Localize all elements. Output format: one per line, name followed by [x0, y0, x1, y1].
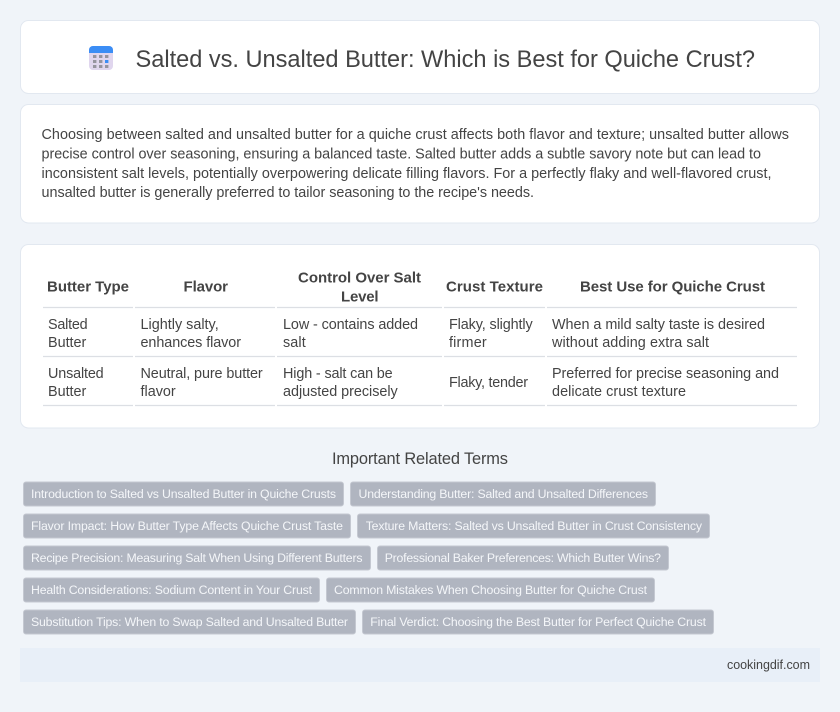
table row: salted butter: Butter — [48, 335, 87, 351]
tag — [358, 514, 710, 538]
paragraph text: inconsistent salt levels, potentially overpowering delicate filling flavors. For a perfectly flaky and well-flavored crust, — [42, 166, 772, 182]
table row: salted butter: without adding extra salt — [551, 335, 709, 351]
table header row: Crust Texture — [446, 278, 543, 296]
tag: Understanding Butter: Salted and Unsalted Differences — [358, 487, 648, 501]
tag — [24, 482, 344, 506]
table row: salted butter: When a mild salty taste is desired — [552, 317, 765, 333]
paragraph text — [42, 127, 789, 201]
tag: Health Considerations: Sodium Content in Your Crust — [31, 583, 313, 597]
tag group: related terms — [24, 482, 714, 634]
table header row: Level — [341, 288, 378, 306]
table row: salted butter: salt — [283, 335, 306, 351]
table row: salted butter: Flaky, slightly — [449, 317, 533, 333]
panel: comparison table — [20, 244, 820, 428]
table row: unsalted butter — [48, 366, 779, 400]
table row: salted butter: enhances flavor — [140, 335, 241, 351]
table row: salted butter: Salted — [48, 317, 88, 333]
table row: unsalted butter: delicate crust texture — [552, 384, 686, 400]
table header row — [47, 270, 765, 306]
tag: Texture Matters: Salted vs Unsalted Butter in Crust Consistency — [366, 519, 703, 533]
paragraph text: Choosing between salted and unsalted butter for a quiche crust affects both flavor and texture; unsalted butter allows — [42, 127, 789, 143]
table row: unsalted butter: High - salt can be — [283, 366, 393, 382]
footer bar — [20, 648, 820, 682]
table header row: Butter Type — [47, 278, 129, 296]
tag: Flavor Impact: How Butter Type Affects Quiche Crust Taste — [31, 519, 343, 533]
paragraph text: unsalted butter is generally preferred to tailor seasoning to the recipe's needs. — [42, 185, 534, 201]
title: Salted vs. Unsalted Butter: Which is Best for Quiche Crust? — [136, 47, 755, 73]
table row: unsalted butter: adjusted precisely — [283, 384, 398, 400]
heading: related terms: Important Related Terms — [332, 450, 508, 468]
tag — [378, 546, 668, 570]
panel: introduction paragraph — [20, 104, 820, 223]
icon: calendar — [89, 46, 113, 70]
tag: Recipe Precision: Measuring Salt When Using Different Butters — [31, 551, 362, 565]
table row: unsalted butter: Preferred for precise seasoning and — [552, 366, 779, 382]
table header row: Best Use for Quiche Crust — [580, 278, 765, 296]
tag: Introduction to Salted vs Unsalted Butter in Quiche Crusts — [31, 487, 336, 501]
header panel — [20, 20, 820, 94]
tag — [350, 482, 656, 506]
table row: unsalted butter: Neutral, pure butter — [140, 366, 263, 382]
table header row: Flavor — [184, 278, 228, 296]
tag: Professional Baker Preferences: Which Butter Wins? — [385, 551, 661, 565]
table row: salted butter — [48, 317, 765, 351]
tag — [24, 546, 370, 570]
tag — [24, 578, 320, 602]
table header row: Control Over Salt — [298, 270, 421, 286]
table row: unsalted butter: flavor — [140, 384, 176, 400]
paragraph text: precise control over seasoning, ensuring a balanced taste. Salted butter adds a subtle savory note but can lead to — [42, 146, 761, 162]
tag — [24, 610, 356, 634]
table row: salted butter: Lightly salty, — [140, 317, 219, 333]
table row: unsalted butter: Flaky, tender — [449, 375, 528, 391]
tag — [362, 610, 714, 634]
tag — [326, 578, 654, 602]
table row: salted butter: Low - contains added — [283, 317, 418, 333]
tag: Common Mistakes When Choosing Butter for Quiche Crust — [334, 583, 648, 597]
tag — [24, 514, 350, 538]
table row: unsalted butter: Butter — [48, 384, 87, 400]
table row: unsalted butter: Unsalted — [48, 366, 104, 382]
tag: Substitution Tips: When to Swap Salted and Unsalted Butter — [31, 615, 348, 629]
footer source text: cookingdif.com — [727, 658, 810, 672]
tag: Final Verdict: Choosing the Best Butter for Perfect Quiche Crust — [370, 615, 707, 629]
table row: salted butter: firmer — [449, 335, 487, 351]
